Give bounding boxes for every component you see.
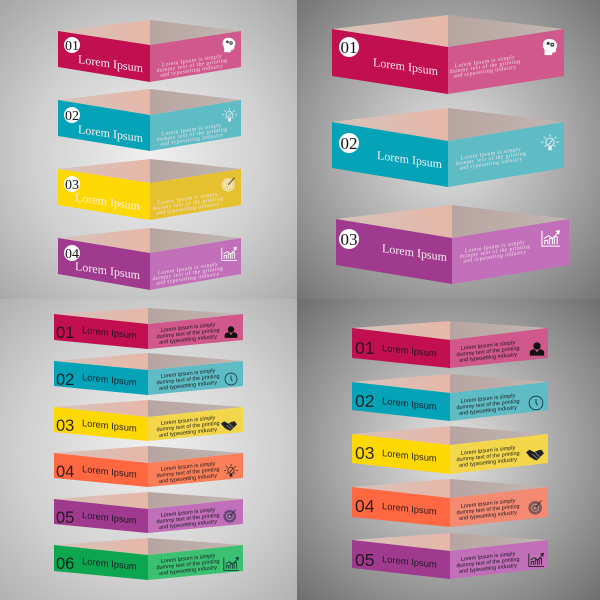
box 04 orange	[54, 446, 243, 487]
description: dummy text of the printing	[157, 126, 227, 143]
description: dummy text of the printing	[156, 374, 220, 386]
box 04 purple	[58, 228, 241, 290]
description: and typesetting industry	[459, 457, 517, 469]
icon: head with gears	[223, 38, 235, 52]
number 01: 01	[340, 38, 358, 57]
description: and typesetting industry	[463, 249, 527, 265]
description: Lorem Ipsum is simply	[161, 415, 216, 427]
box 04 orange	[352, 479, 548, 527]
icon: growth chart	[224, 557, 239, 570]
number 04: 04	[355, 496, 375, 516]
box 03 yellow	[352, 426, 548, 474]
description: and typesetting industry	[159, 519, 217, 531]
panel background: bottom left	[0, 299, 297, 600]
description: and typesetting industry	[159, 427, 217, 439]
box 02 teal	[332, 108, 564, 187]
number 03: 03	[340, 230, 358, 249]
heading: Lorem Ipsum	[377, 148, 443, 171]
description: dummy text of the printing	[456, 557, 520, 569]
description: Lorem Ipsum is simply	[461, 393, 516, 405]
description: Lorem Ipsum is simply	[461, 445, 516, 457]
description: Lorem Ipsum is simply	[158, 192, 218, 207]
panel background: top left	[0, 0, 297, 299]
description: dummy text of the printing	[456, 399, 520, 411]
description: and typesetting industry	[159, 565, 217, 577]
description: Lorem Ipsum is simply	[161, 553, 216, 565]
box 03 yellow	[54, 400, 243, 441]
box 02 teal	[54, 353, 243, 395]
panel: six-step sans infographic	[54, 308, 243, 580]
box 06 green	[54, 538, 243, 580]
description: Lorem Ipsum is simply	[461, 340, 516, 352]
description: Lorem Ipsum is simply	[162, 54, 222, 69]
icon: growth chart	[222, 247, 237, 260]
description: Lorem Ipsum is simply	[161, 461, 216, 473]
description: dummy text of the printing	[450, 58, 520, 75]
heading: Lorem Ipsum	[382, 241, 448, 264]
description: dummy text of the printing	[156, 559, 220, 571]
heading: Lorem Ipsum	[78, 122, 144, 145]
heading: Lorem Ipsum	[382, 395, 437, 412]
heading: Lorem Ipsum	[382, 553, 437, 570]
box 03 purple	[336, 205, 569, 284]
description: and typesetting industry	[459, 156, 523, 172]
description: and typesetting industry	[159, 473, 217, 485]
number 04: 04	[65, 247, 79, 262]
description: dummy text of the printing	[456, 504, 520, 516]
panel: four-step serif infographic	[58, 20, 241, 290]
description: dummy text of the printing	[456, 451, 520, 463]
description: dummy text of the printing	[156, 421, 220, 433]
number 05: 05	[355, 550, 374, 570]
description: and typesetting industry	[459, 405, 517, 417]
description: and typesetting industry	[159, 334, 217, 346]
panel: three-step serif infographic	[332, 15, 569, 284]
description: Lorem Ipsum is simply	[461, 551, 516, 563]
description: dummy text of the printing	[460, 243, 530, 260]
box 01 crimson	[54, 308, 243, 349]
icon: person	[530, 342, 544, 356]
description: dummy text of the printing	[456, 346, 520, 358]
description: and typesetting industry	[160, 63, 224, 79]
description: Lorem Ipsum is simply	[161, 368, 216, 380]
description: dummy text of the printing	[156, 467, 220, 479]
number 05: 05	[56, 509, 74, 527]
heading: Lorem Ipsum	[82, 509, 137, 526]
box 02 teal	[352, 374, 548, 421]
icon: target	[528, 501, 542, 515]
icon: handshake	[221, 421, 237, 431]
number 01: 01	[355, 338, 374, 358]
description: dummy text of the printing	[157, 57, 227, 74]
heading: Lorem Ipsum	[82, 324, 137, 341]
icon: target	[221, 178, 235, 192]
panel: five-step sans infographic	[352, 321, 548, 579]
icon: growth chart	[542, 230, 560, 246]
description: and typesetting industry	[459, 563, 517, 575]
description: dummy text of the printing	[156, 513, 220, 525]
description: Lorem Ipsum is simply	[455, 55, 515, 70]
description: and typesetting industry	[459, 352, 517, 364]
number 01: 01	[56, 324, 74, 342]
icon: light bulb	[222, 108, 237, 122]
description: and typesetting industry	[156, 271, 220, 287]
description: Lorem Ipsum is simply	[161, 507, 216, 519]
heading: Lorem Ipsum	[382, 447, 437, 464]
box 01 crimson	[58, 20, 241, 82]
description: Lorem Ipsum is simply	[461, 498, 516, 510]
description: Lorem Ipsum is simply	[158, 262, 218, 277]
description: and typesetting industry	[156, 201, 220, 217]
heading: Lorem Ipsum	[382, 500, 437, 517]
heading: Lorem Ipsum	[382, 342, 437, 359]
description: dummy text of the printing	[153, 195, 223, 212]
description: Lorem Ipsum is simply	[461, 147, 521, 162]
box 05 purple	[352, 533, 548, 579]
panel background: top right	[297, 0, 600, 299]
icon: growth chart	[529, 553, 544, 566]
heading: Lorem Ipsum	[82, 371, 137, 388]
description: Lorem Ipsum is simply	[161, 322, 216, 334]
box 02 teal	[58, 89, 241, 151]
heading: Lorem Ipsum	[75, 259, 141, 282]
icon: target	[223, 510, 236, 523]
number 03: 03	[65, 178, 79, 193]
icon: head with gears	[543, 39, 557, 55]
number 01: 01	[65, 39, 79, 54]
icon: light bulb	[224, 464, 238, 477]
heading: Lorem Ipsum	[82, 555, 137, 572]
heading: Lorem Ipsum	[373, 55, 439, 78]
number 03: 03	[355, 443, 374, 463]
description: Lorem Ipsum is simply	[162, 123, 222, 138]
icon: person	[225, 326, 237, 338]
panel background: bottom right	[297, 299, 600, 600]
icon: clock	[225, 373, 237, 385]
icon: handshake	[526, 450, 544, 460]
description: and typesetting industry	[459, 510, 517, 522]
number 03: 03	[56, 417, 74, 435]
description: Lorem Ipsum is simply	[465, 240, 525, 255]
icon: light bulb	[541, 134, 559, 150]
description: dummy text of the printing	[153, 265, 223, 282]
heading: Lorem Ipsum	[82, 463, 137, 480]
description: and typesetting industry	[159, 380, 217, 392]
description: dummy text of the printing	[456, 150, 526, 167]
number 02: 02	[355, 391, 374, 411]
description: and typesetting industry	[160, 132, 224, 148]
heading: Lorem Ipsum	[78, 52, 144, 75]
box 05 purple	[54, 492, 243, 533]
number 06: 06	[56, 555, 74, 573]
heading: Lorem Ipsum	[82, 417, 137, 434]
box 01 crimson	[352, 321, 548, 368]
heading: Lorem Ipsum	[75, 190, 141, 213]
description: and typesetting industry	[453, 64, 517, 80]
box 01 crimson	[332, 15, 564, 94]
number 02: 02	[56, 371, 74, 389]
box 03 yellow	[58, 159, 241, 220]
number 02: 02	[65, 109, 79, 124]
number 04: 04	[56, 463, 74, 481]
number 02: 02	[340, 134, 358, 153]
icon: clock	[529, 396, 543, 410]
description: dummy text of the printing	[156, 328, 220, 340]
